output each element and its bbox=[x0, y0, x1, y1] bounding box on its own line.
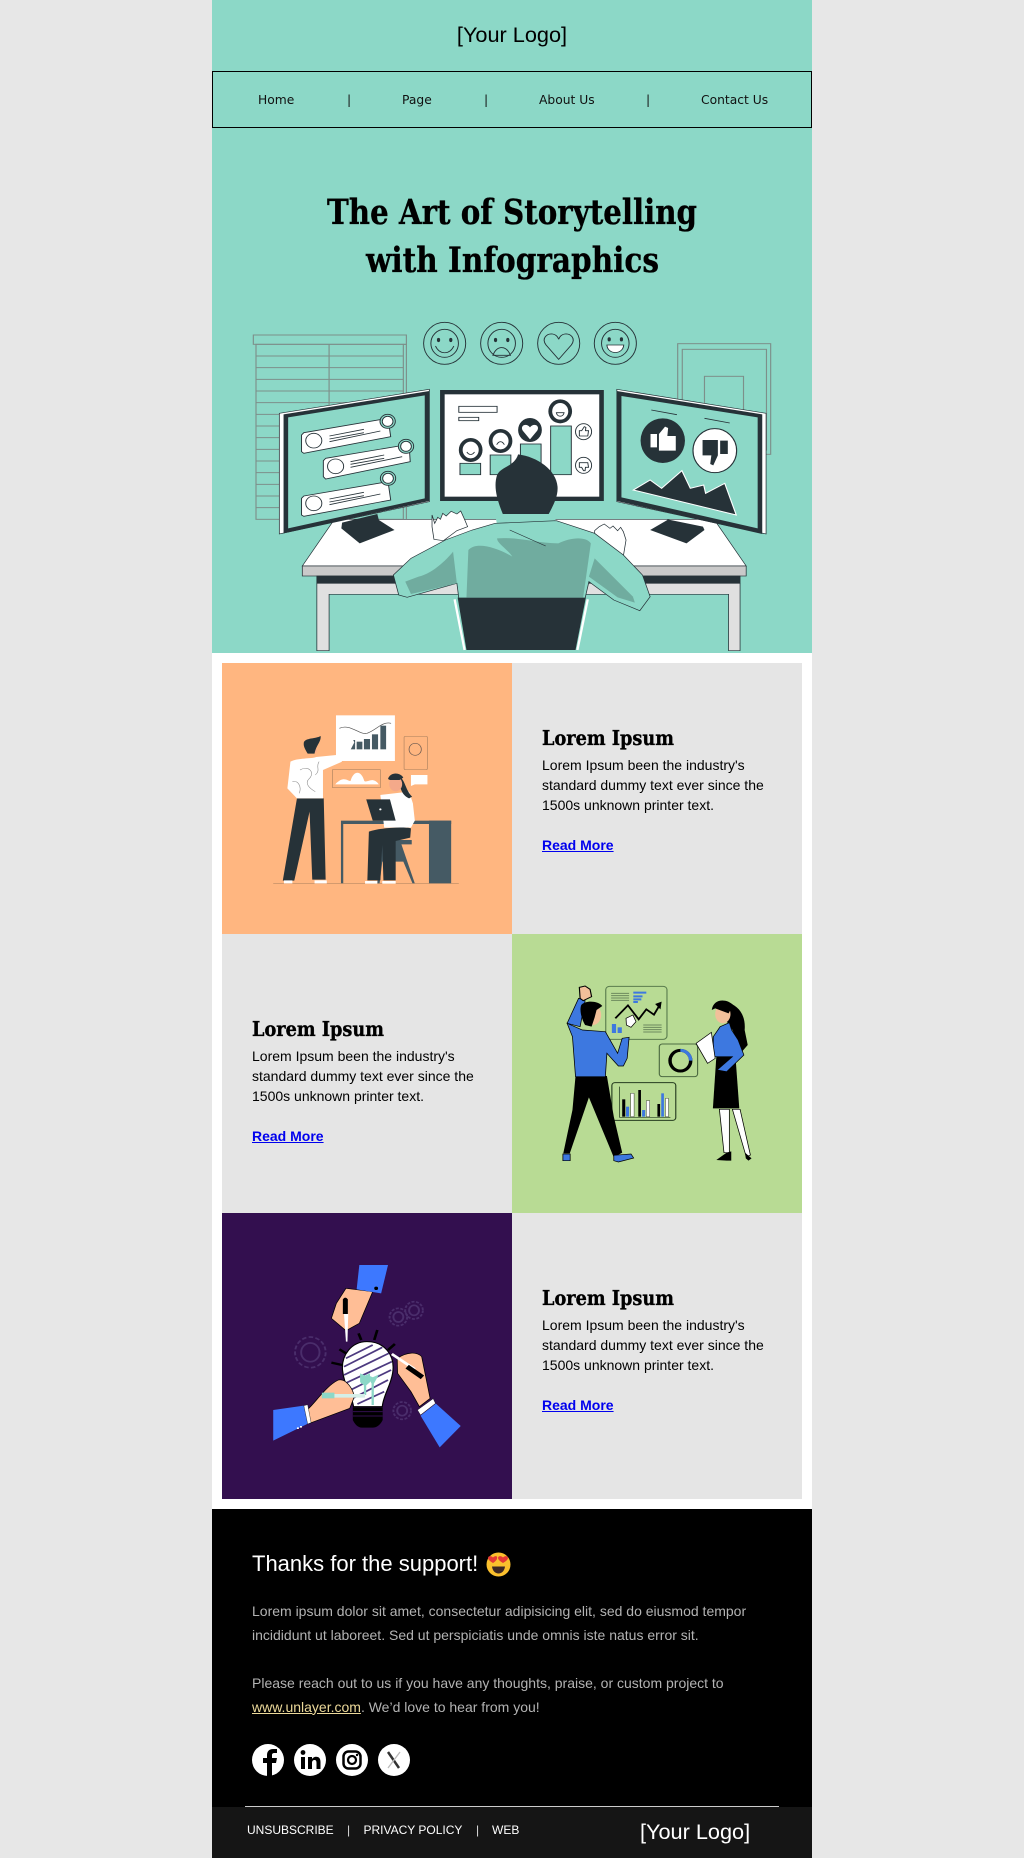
speech bubble bbox=[411, 775, 427, 786]
body text: 1500s unknown printer text. bbox=[542, 1357, 714, 1373]
contact paragraph: Please reach out to us if you have any thoughts, praise, or custom project to bbox=[252, 1674, 724, 1690]
light bulb bbox=[331, 1330, 395, 1428]
body text bbox=[542, 757, 764, 813]
link: Read More bbox=[542, 1397, 614, 1413]
privacy link: PRIVACY POLICY bbox=[364, 1823, 462, 1837]
nav separator: | bbox=[484, 93, 488, 107]
body text bbox=[542, 1317, 764, 1373]
illustration: three hands drawing a light bulb bbox=[273, 1265, 461, 1448]
desk bbox=[302, 519, 746, 651]
navigation bar bbox=[212, 71, 812, 128]
standing man bbox=[283, 734, 354, 883]
nav links bbox=[258, 93, 768, 107]
footer panel: black bbox=[212, 1509, 812, 1807]
icon: thumbs up bbox=[641, 418, 685, 463]
card row 2: image bbox=[512, 934, 802, 1213]
woman with clipboard bbox=[696, 1000, 752, 1161]
emoji row bbox=[424, 322, 636, 364]
body text bbox=[252, 1048, 474, 1104]
body text: standard dummy text ever since the bbox=[252, 1068, 474, 1084]
panel: line chart bbox=[606, 986, 667, 1039]
unsubscribe link: UNSUBSCRIBE bbox=[247, 1823, 334, 1837]
bar chart of reactions bbox=[460, 426, 571, 475]
body paragraph: incididunt ut laboreet. Sed ut perspiciatis unde omnis iste natus error sit. bbox=[252, 1627, 699, 1643]
card row 2: text panel bbox=[222, 934, 512, 1213]
body paragraph: Lorem ipsum dolor sit amet, consectetur adipisicing elit, sed do eiusmod tempor bbox=[252, 1603, 746, 1619]
chart board bbox=[336, 715, 395, 761]
gears bbox=[295, 1302, 423, 1419]
nav: Contact Us: Contact Us bbox=[701, 93, 768, 107]
title: The Art of Storytelling bbox=[327, 192, 697, 233]
icon: instagram bbox=[336, 1744, 368, 1776]
body text: Lorem Ipsum been the industry's bbox=[542, 1317, 745, 1333]
heading: Lorem Ipsum bbox=[252, 1017, 384, 1041]
hands bbox=[432, 511, 468, 541]
seated woman bbox=[365, 774, 415, 884]
mini area chart bbox=[333, 770, 380, 788]
heading: Lorem Ipsum bbox=[542, 1286, 674, 1310]
icon: frown bbox=[481, 322, 523, 364]
ground line bbox=[273, 882, 459, 884]
chair bbox=[458, 598, 586, 650]
footer bar bbox=[212, 1807, 812, 1858]
body text: 1500s unknown printer text. bbox=[252, 1088, 424, 1104]
card row 3: text panel bbox=[512, 1213, 802, 1499]
phone card bbox=[404, 736, 427, 770]
body text: standard dummy text ever since the bbox=[542, 777, 764, 793]
body text: standard dummy text ever since the bbox=[542, 1337, 764, 1353]
illustration: two analysts with charts bbox=[562, 986, 752, 1162]
heading: Lorem Ipsum bbox=[542, 726, 674, 750]
card row 3: image bbox=[222, 1213, 512, 1499]
hair bbox=[496, 454, 558, 514]
card row 1: image bbox=[222, 663, 512, 934]
nav: About Us: About Us bbox=[539, 93, 595, 107]
shirt bbox=[393, 521, 650, 611]
footer logo: [Your Logo] bbox=[640, 1819, 750, 1844]
comment cards bbox=[302, 414, 414, 516]
left monitor bbox=[279, 389, 429, 534]
hand: right with pen bbox=[392, 1353, 461, 1447]
man pointing at chart bbox=[563, 986, 636, 1162]
link: Read More bbox=[252, 1128, 324, 1144]
icon: laugh bbox=[594, 322, 636, 364]
icon: heart bbox=[538, 322, 580, 364]
web link: WEB bbox=[492, 1823, 519, 1837]
separator: | bbox=[347, 1823, 350, 1837]
nav separator: | bbox=[646, 93, 650, 107]
nav: Home: Home bbox=[258, 93, 294, 107]
icon: smile bbox=[424, 322, 466, 364]
separator: | bbox=[476, 1823, 479, 1837]
hand: top with pen bbox=[331, 1265, 388, 1342]
panel: bar chart bbox=[612, 1083, 676, 1120]
hero illustration: person at three monitors bbox=[252, 322, 772, 651]
title bbox=[327, 192, 697, 281]
body text: 1500s unknown printer text. bbox=[542, 797, 714, 813]
nav: Page: Page bbox=[402, 93, 432, 107]
window blinds bbox=[253, 335, 406, 519]
illustration: two colleagues at a chart board bbox=[273, 715, 459, 884]
link: Read More bbox=[542, 837, 614, 853]
panel: donut chart bbox=[659, 1044, 698, 1077]
icon: thumbs down bbox=[693, 429, 737, 473]
logo: [Your Logo] bbox=[457, 22, 567, 47]
nav separator: | bbox=[347, 93, 351, 107]
desk bbox=[341, 821, 451, 883]
neck bbox=[493, 503, 558, 525]
shirt shading bbox=[405, 538, 635, 603]
title: with Infographics bbox=[365, 240, 659, 281]
header panel: teal background with logo, nav, title and hero bbox=[212, 0, 812, 653]
person seen from behind bbox=[393, 454, 650, 650]
icon: facebook bbox=[252, 1744, 284, 1776]
thanks heading: Thanks for the support! bbox=[252, 1550, 478, 1576]
card row 1: text panel bbox=[512, 663, 802, 934]
icon: x bbox=[378, 1744, 410, 1776]
center monitor bbox=[440, 390, 604, 501]
icon: heart eyes emoji bbox=[486, 1552, 510, 1576]
hand: left with marker bbox=[273, 1380, 365, 1441]
contact paragraph: www.unlayer.com. We’d love to hear from you! bbox=[252, 1698, 540, 1714]
body text: Lorem Ipsum been the industry's bbox=[542, 757, 745, 773]
body paragraph bbox=[252, 1603, 746, 1643]
monitor stands bbox=[341, 514, 704, 543]
footer divider bbox=[245, 1806, 779, 1807]
wall frames bbox=[678, 344, 771, 454]
area chart bbox=[633, 471, 736, 515]
right monitor bbox=[617, 389, 766, 534]
contact paragraph bbox=[252, 1674, 724, 1715]
icon: linkedin bbox=[294, 1744, 326, 1776]
content panel: white bbox=[212, 653, 812, 1509]
body text: Lorem Ipsum been the industry's bbox=[252, 1048, 455, 1064]
